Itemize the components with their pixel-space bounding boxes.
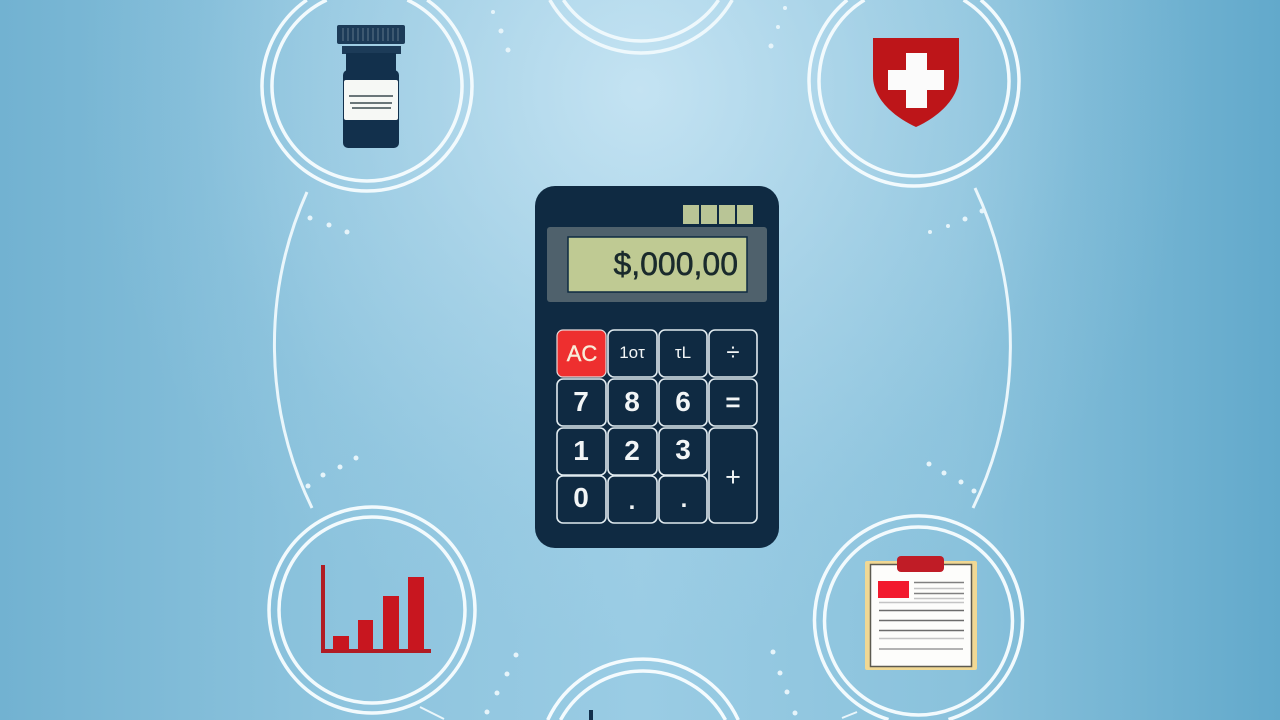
key labels: ÷ (726, 339, 740, 366)
display readout: $,000,00 (613, 246, 738, 282)
key labels: . (629, 488, 635, 515)
keypad frames (557, 330, 757, 523)
keypad (557, 330, 757, 523)
ring: top partial (550, 0, 732, 53)
ring: insurance shield (809, 0, 1019, 186)
display screen (568, 237, 747, 292)
ring: bottom partial (548, 659, 738, 720)
arc: left connector (274, 192, 312, 508)
icon: shield with cross (873, 38, 959, 127)
key labels: . (681, 486, 687, 513)
key labels (573, 339, 741, 515)
key labels: 3 (675, 434, 691, 465)
solar panel (683, 205, 753, 224)
key labels: 6 (675, 386, 691, 417)
key labels: τL (675, 343, 691, 362)
ring: medicine bottle (262, 0, 472, 191)
key labels: 1oτ (619, 343, 645, 362)
dotted connectors (306, 6, 984, 716)
key labels: 7 (573, 386, 589, 417)
ring: clipboard report (815, 516, 1022, 720)
key labels: + (725, 462, 741, 492)
panel: medicine bottle (262, 0, 472, 191)
ring: bar chart (269, 507, 475, 713)
arc: right connector (973, 188, 1010, 508)
calculator body (535, 186, 779, 548)
key labels: 8 (624, 386, 640, 417)
key labels: 2 (624, 435, 640, 466)
icon: medicine bottle (337, 25, 405, 148)
key: AC (557, 330, 606, 377)
arc: bottom right fragment (842, 712, 857, 718)
panel: clipboard report (815, 516, 1022, 720)
arc: bottom left fragment (420, 707, 444, 719)
icon: clipboard (865, 556, 977, 670)
display bezel (547, 227, 767, 302)
icon: partial bottom icon stem (589, 710, 593, 720)
key labels: = (725, 387, 741, 417)
panel: insurance shield (809, 0, 1019, 186)
chart: rising red bars (321, 565, 431, 653)
key labels: 1 (573, 435, 589, 466)
calculator (535, 186, 779, 548)
key labels: 0 (573, 482, 589, 513)
key: AC: AC (567, 341, 597, 366)
panel: bar chart (269, 507, 475, 713)
